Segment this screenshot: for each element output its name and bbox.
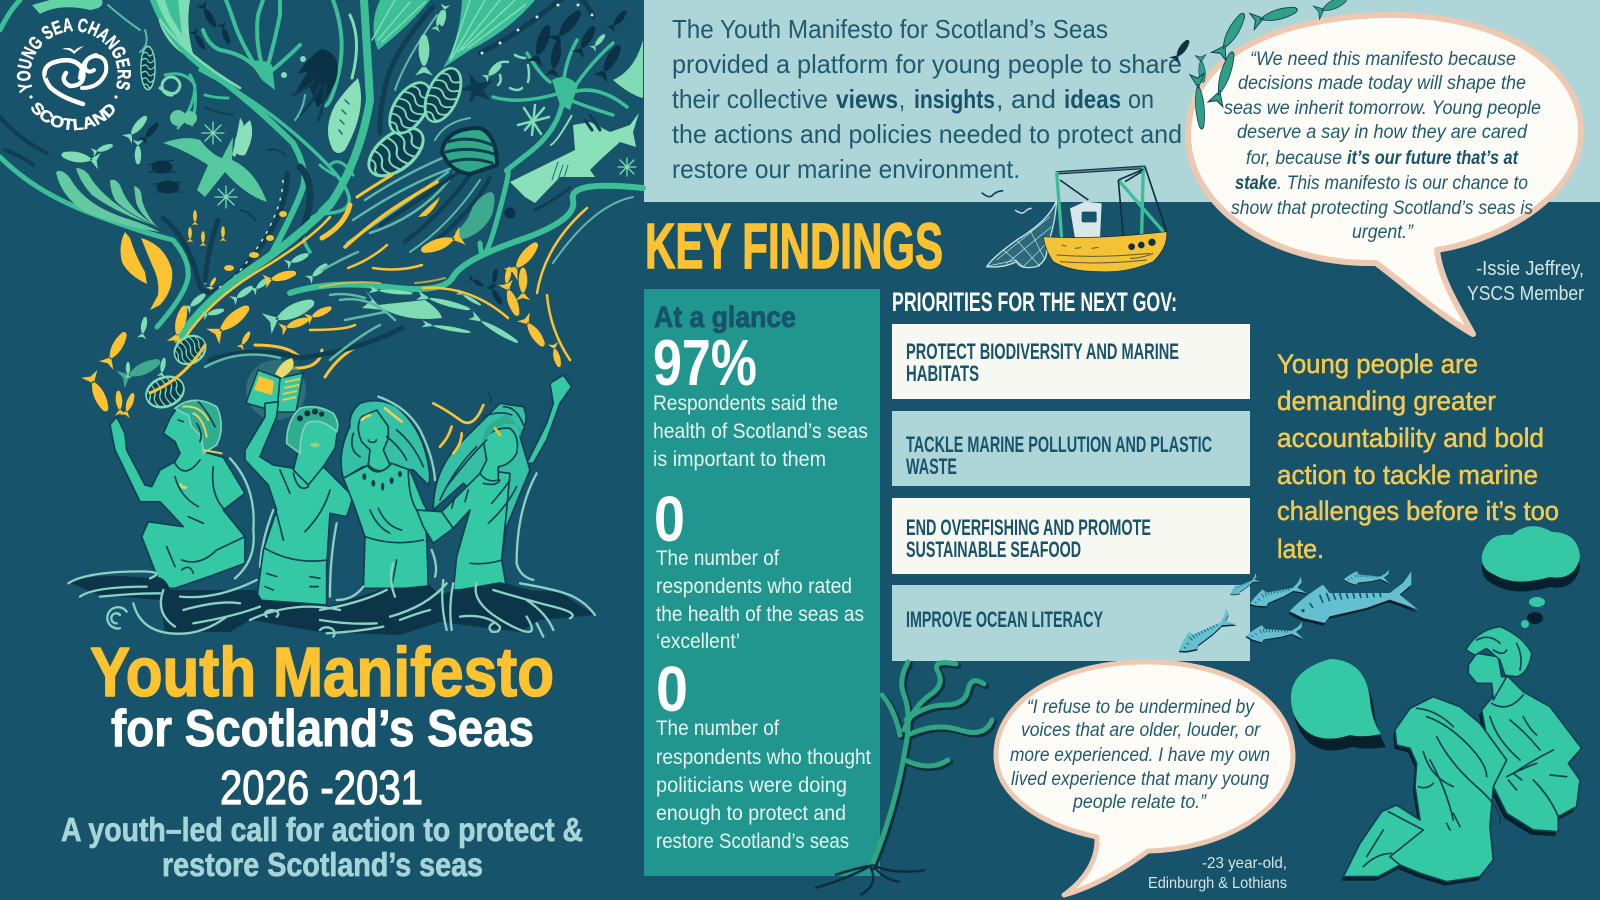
mackerel in stream <box>362 286 521 347</box>
stat: zero rated excellent: The number of <box>656 547 779 570</box>
priority box 4: IMPROVE OCEAN LITERACY <box>906 607 1103 632</box>
speech bubble: Issie Jeffrey quote: show that protecting Scotland’s seas is <box>1231 198 1533 219</box>
stat: zero thought politicians doing enough: enough to protect and <box>656 802 846 825</box>
stat: zero rated excellent: 0 <box>654 483 685 555</box>
callout: young people demanding accountability: late. <box>1277 534 1324 564</box>
person 1 <box>110 400 254 588</box>
speech bubble: Issie Jeffrey quote: urgent.” <box>1352 222 1415 243</box>
intro text: on <box>1128 84 1154 114</box>
chain kelp <box>163 173 287 292</box>
attribution: Issie Jeffrey: YSCS Member <box>1467 283 1584 305</box>
mussels <box>141 46 468 413</box>
intro text: , <box>899 84 905 114</box>
stat: zero rated excellent: the health of the seas as <box>656 603 864 626</box>
octopus <box>298 50 337 106</box>
heading: key findings: KEY FINDINGS <box>645 210 943 282</box>
green fish <box>455 192 495 240</box>
intro text: restore our marine environment. <box>672 154 1020 184</box>
stat: 97 percent <box>653 326 868 471</box>
persons 3 and 4 <box>341 375 572 590</box>
tagline: restore Scotland’s seas <box>162 846 483 883</box>
trunks <box>178 0 370 340</box>
intro text: provided a platform for young people to share <box>672 49 1182 79</box>
intro text <box>672 14 1182 184</box>
person 3 <box>341 397 436 588</box>
attribution: 23 year-old: -23 year-old, <box>1202 855 1287 872</box>
stat: zero rated excellent: ‘excellent’ <box>656 630 740 653</box>
priority box 2 <box>892 411 1250 486</box>
speech bubble: Issie Jeffrey quote: it’s our future that’s at <box>1347 148 1519 169</box>
priority box 4 <box>892 585 1250 661</box>
stars <box>202 105 636 208</box>
attribution: Issie Jeffrey: -Issie Jeffrey, <box>1476 258 1584 280</box>
icon: green fish over bubble <box>1170 0 1349 130</box>
priority box 3: END OVERFISHING AND PROMOTE <box>906 515 1151 540</box>
stat: 97 percent: 97% <box>653 326 757 399</box>
speech bubble: Issie Jeffrey quote: deserve a say in how they are cared <box>1237 122 1528 143</box>
panel: at a glance <box>644 289 880 876</box>
stat: zero thought politicians doing enough: respondents who thought <box>656 746 871 769</box>
speech bubble: Issie Jeffrey quote <box>1188 15 1581 334</box>
panel: intro background <box>644 0 1600 202</box>
stat: 97 percent: is important to them <box>653 448 826 471</box>
speech bubble: Issie Jeffrey quote: decisions made today will shape the <box>1238 73 1526 94</box>
speech bubble: Issie Jeffrey quote: for, because <box>1246 148 1342 169</box>
tree kelp <box>480 100 563 254</box>
jellyfish <box>347 118 497 252</box>
icon: fishing boat <box>982 166 1167 272</box>
stat: zero thought politicians doing enough: 0 <box>656 653 688 725</box>
sea creatures <box>60 4 608 388</box>
stat: zero thought politicians doing enough: restore Scotland’s seas <box>656 830 849 853</box>
long fish <box>328 78 361 153</box>
book <box>246 358 306 420</box>
stat: zero thought politicians doing enough: politicians were doing <box>656 774 847 797</box>
fan kelp <box>443 0 535 68</box>
speech bubble: 23 year-old quote <box>996 662 1293 895</box>
priority box 3 <box>892 498 1250 574</box>
logo: Young Sea Changers Scotland: SCOTLAND <box>31 102 115 130</box>
callout: young people demanding accountability: Young people are <box>1277 349 1478 379</box>
speech bubble: Issie Jeffrey quote: seas we inherit tomorrow. Young people <box>1224 98 1541 119</box>
stat: zero rated excellent: respondents who rated <box>656 575 852 598</box>
callout: young people demanding accountability: challenges before it’s too <box>1277 496 1559 526</box>
bird <box>163 137 267 202</box>
intro text: their collective <box>672 84 828 114</box>
icon: shoal of mackerel <box>1170 565 1418 658</box>
speech bubble: Issie Jeffrey quote: . This manifesto is our chance to <box>1277 173 1528 194</box>
priority box 2: TACKLE MARINE POLLUTION AND PLASTIC <box>906 432 1212 457</box>
callout: young people demanding accountability: demanding greater <box>1277 386 1496 416</box>
attribution: 23 year-old <box>1148 855 1287 892</box>
icon: teal speech bubble <box>1291 659 1386 751</box>
persons 1 and 2 <box>110 400 353 605</box>
priority box 1: HABITATS <box>906 361 979 386</box>
speech bubble: 23 year-old quote: more experienced. I have my own <box>1010 745 1270 766</box>
illustration: seaweed <box>815 662 994 895</box>
speech bubble: Issie Jeffrey quote: stake <box>1235 173 1277 194</box>
date range: 2026 -2031 <box>220 762 423 815</box>
person 2 <box>245 402 353 605</box>
attribution: Issie Jeffrey <box>1467 258 1584 305</box>
intro text: , and <box>996 84 1056 114</box>
title: Youth Manifesto: Youth Manifesto <box>90 633 554 711</box>
girl <box>1341 697 1537 886</box>
callout: young people demanding accountability: accountability and bold <box>1277 423 1544 453</box>
boy <box>1466 627 1582 836</box>
intro text: ideas <box>1064 84 1121 114</box>
priority box 2: WASTE <box>906 454 957 479</box>
stat: 97 percent: health of Scotland’s seas <box>653 420 868 443</box>
stat: 97 percent: Respondents said the <box>653 392 838 415</box>
panel heading: At a glance <box>654 301 796 334</box>
intro text: views <box>836 84 898 114</box>
callout: young people demanding accountability <box>1277 349 1559 564</box>
stat: zero thought politicians doing enough <box>656 653 871 853</box>
subtitle: for Scotland's Seas: for Scotland’s Seas <box>111 700 534 758</box>
stat: zero rated excellent <box>654 483 864 653</box>
callout: young people demanding accountability: action to tackle marine <box>1277 460 1538 490</box>
shark <box>510 113 639 203</box>
attribution: 23 year-old: Edinburgh & Lothians <box>1148 875 1287 892</box>
person 4 <box>417 375 572 590</box>
priority box 1 <box>892 324 1250 399</box>
tagline <box>61 811 583 883</box>
priority box 3: SUSTAINABLE SEAFOOD <box>906 537 1081 562</box>
speech bubble: 23 year-old quote: voices that are older, louder, or <box>1021 720 1261 741</box>
icon: thought cloud <box>1482 526 1580 628</box>
logo: Young Sea Changers Scotland <box>16 18 131 130</box>
illustration: four young people in the water <box>68 358 595 637</box>
speech bubble: 23 year-old quote: lived experience that many young <box>1011 769 1269 790</box>
illustration: kelp and sea life <box>0 0 643 418</box>
speech bubble: Issie Jeffrey quote: “We need this manifesto because <box>1250 49 1516 70</box>
stat: zero thought politicians doing enough: The number of <box>656 717 779 740</box>
intro text: The Youth Manifesto for Scotland’s Seas <box>672 14 1108 44</box>
star and swirling fish <box>462 75 490 102</box>
intro text: insights <box>914 84 995 114</box>
priority box 1: PROTECT BIODIVERSITY AND MARINE <box>906 339 1179 364</box>
crabs <box>148 160 515 218</box>
speech bubble: 23 year-old quote: people relate to.” <box>1072 792 1208 813</box>
heading: priorities: PRIORITIES FOR THE NEXT GOV: <box>892 287 1177 317</box>
speech bubble: 23 year-old quote: “I refuse to be undermined by <box>1027 697 1255 718</box>
intro text: the actions and policies needed to protect and <box>672 119 1182 149</box>
illustration: two young people seated <box>1341 627 1582 886</box>
yellow fish and ribbons <box>81 197 565 418</box>
water <box>68 563 595 637</box>
tagline: A youth–led call for action to protect & <box>61 811 583 848</box>
logo: Young Sea Changers Scotland: YOUNG SEA CHANGERS <box>16 18 131 94</box>
